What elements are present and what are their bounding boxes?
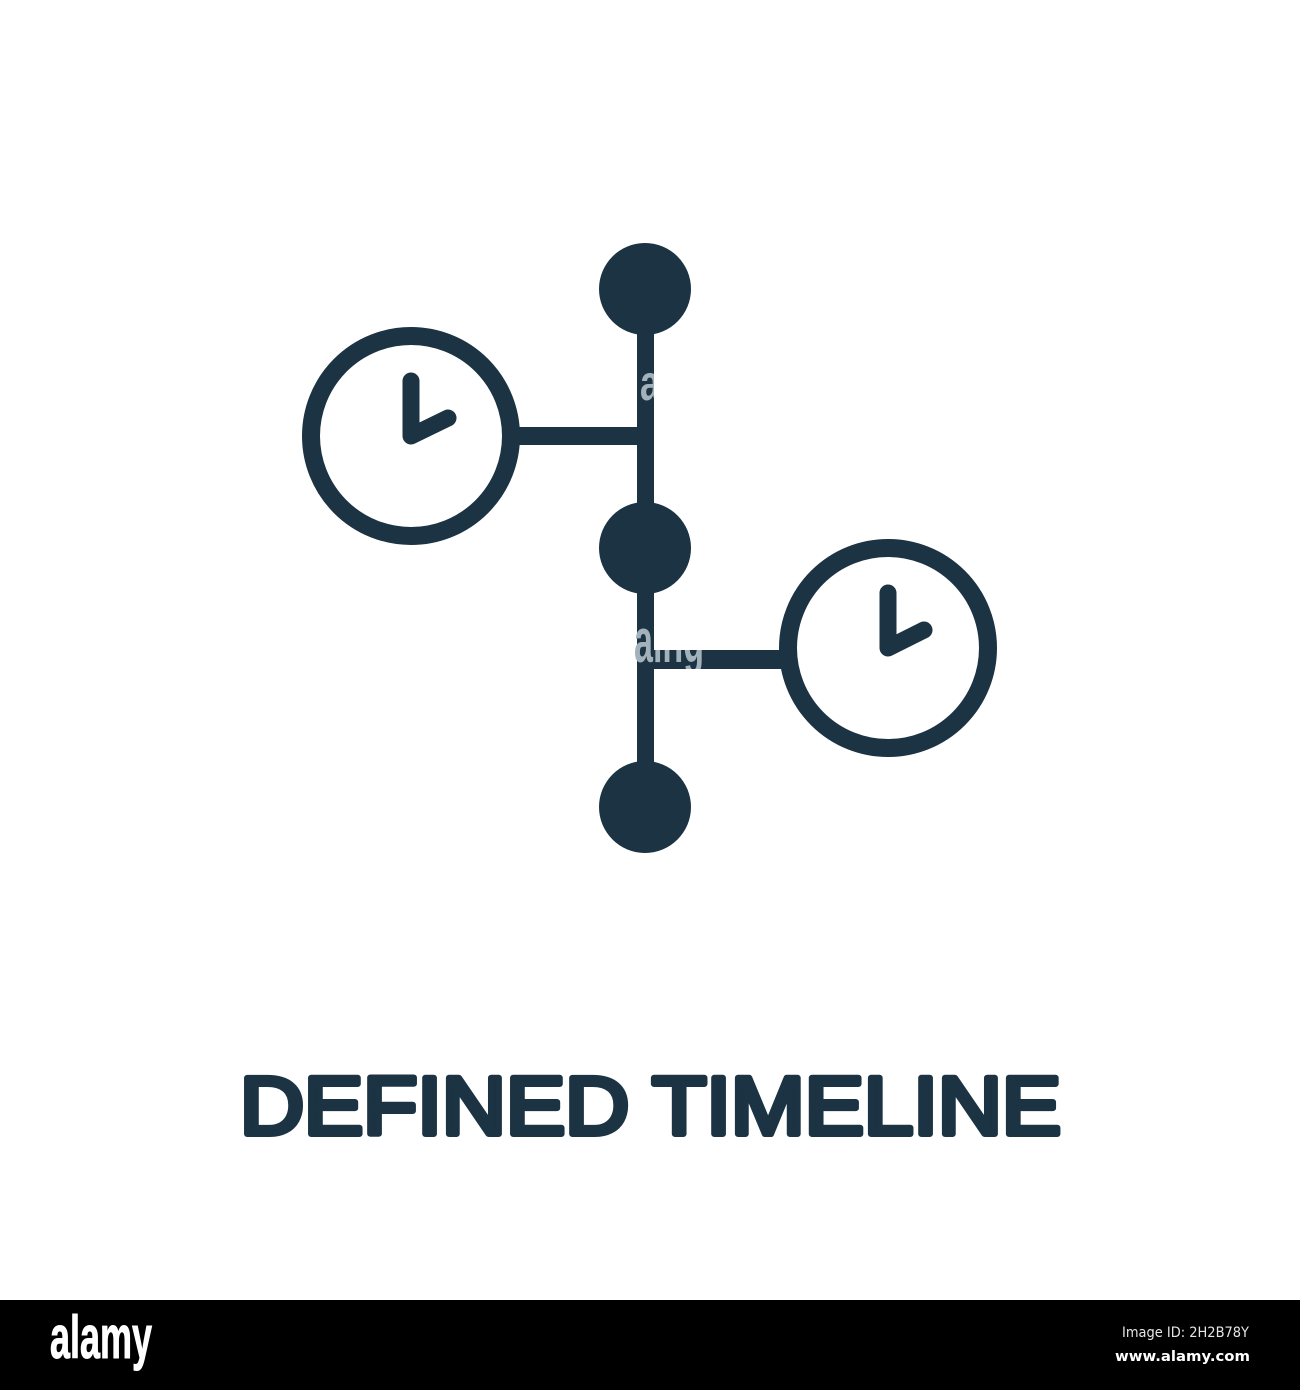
connector: right clock to axis [650,650,785,669]
timeline node: middle [599,502,691,594]
footer logo: alamy [50,1304,152,1371]
vertical timeline axis [637,289,654,807]
icon: defined timeline [311,243,988,853]
connector: left clock to axis [515,427,640,445]
timeline node: bottom [599,761,691,853]
footer bar [0,1300,1300,1390]
icon: right clock [788,548,988,748]
image id: Image ID: 2H2B78Y [1122,1325,1249,1341]
watermark fragment on right connector: alng [634,607,704,676]
icon: left clock [311,336,511,536]
timeline node: top [599,243,691,335]
website: www.alamy.com [1115,1349,1250,1365]
watermark fragment on axis: a [640,355,661,411]
title: DEFINED TIMELINE [240,1061,1061,1152]
